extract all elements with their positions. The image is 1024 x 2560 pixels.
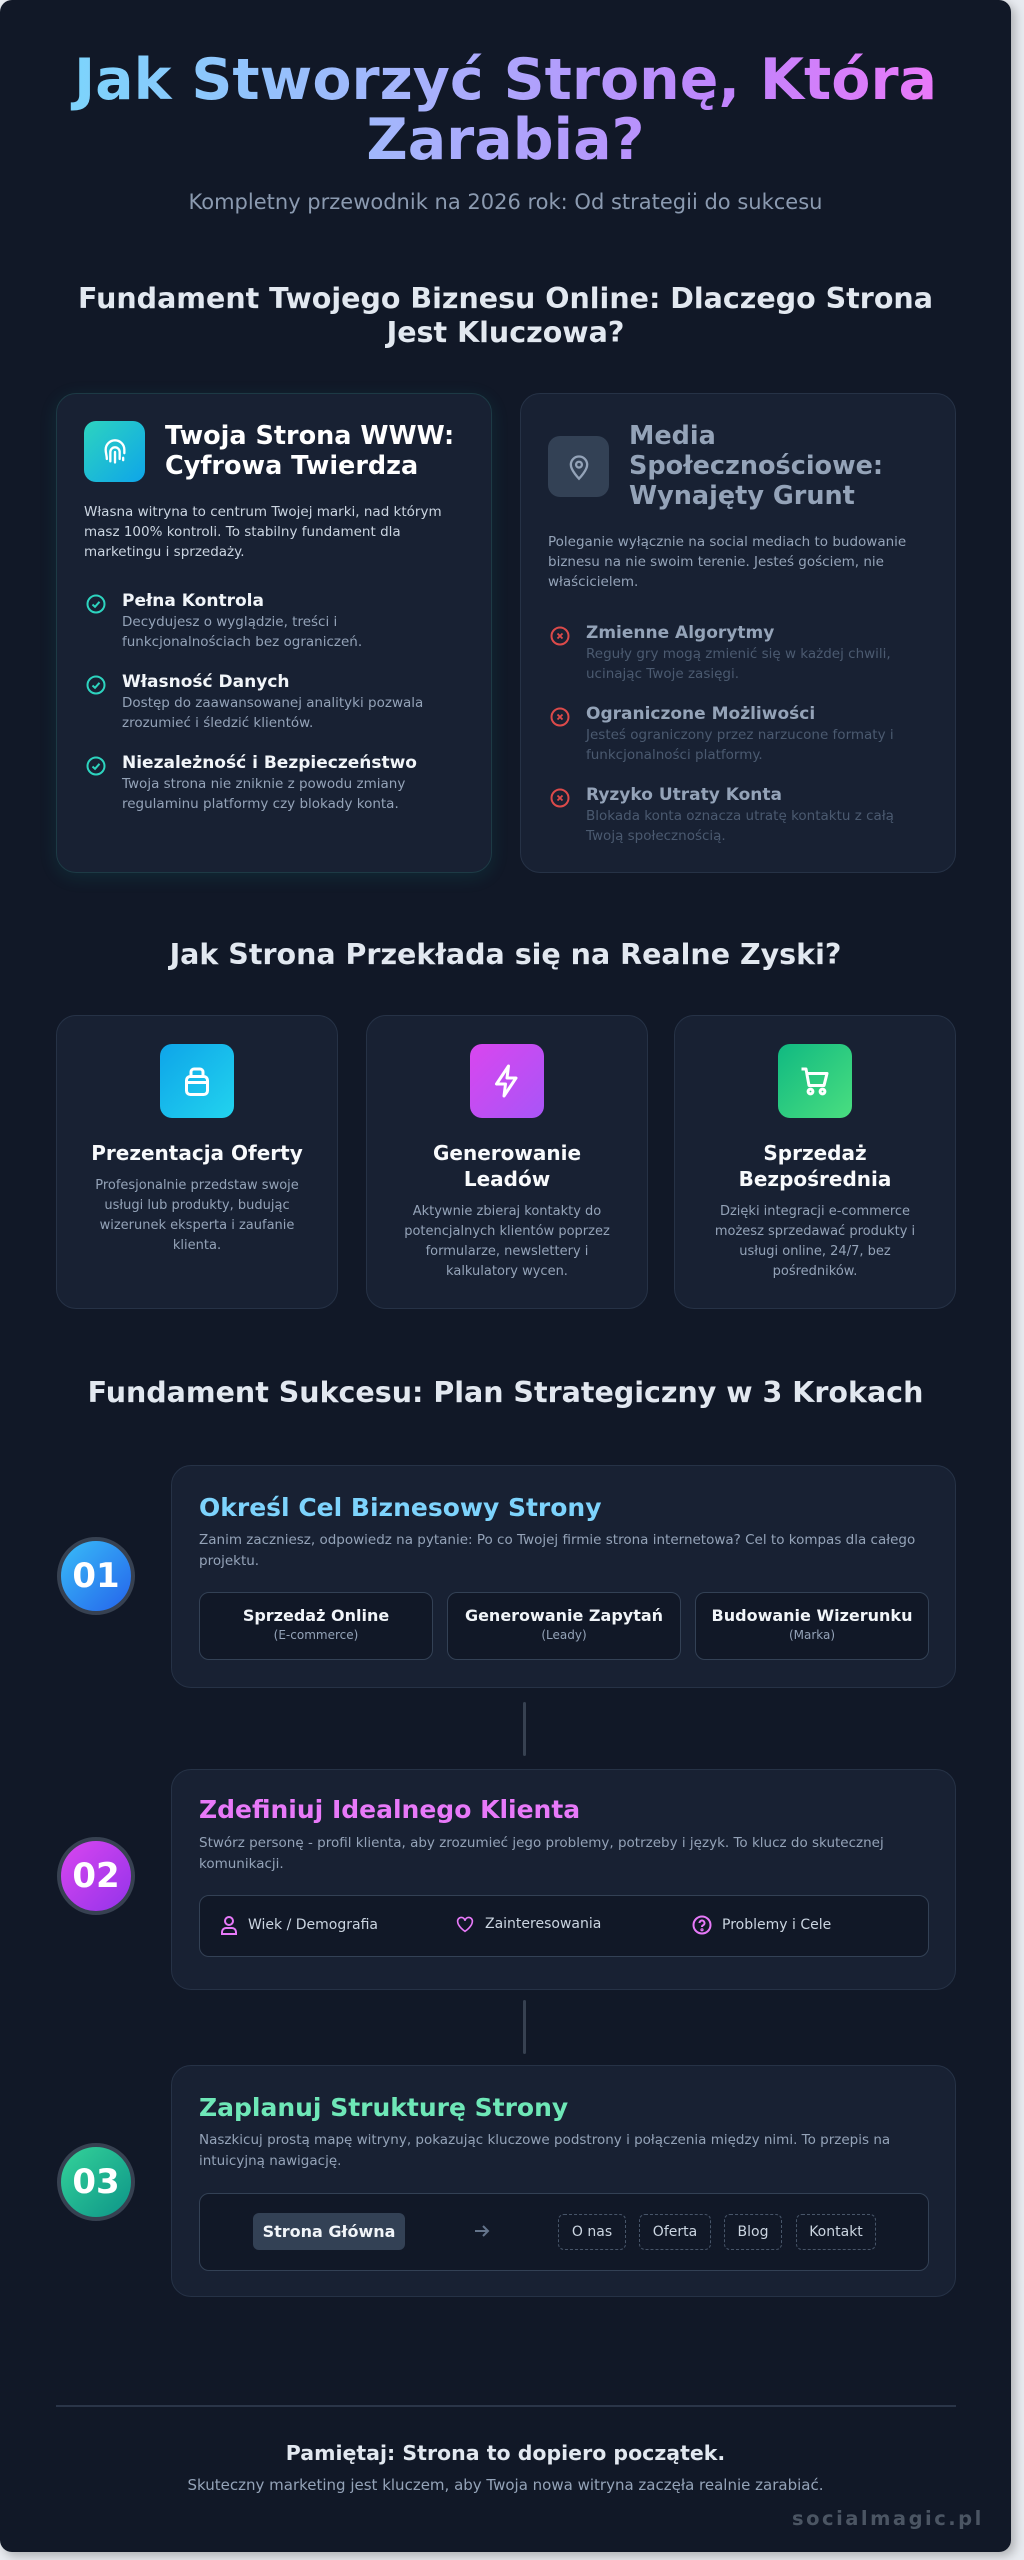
item: independence: Twoja strona nie zniknie z powodu zmiany regulaminu platformy czy blokady konta. xyxy=(122,776,405,812)
option: online sales: (E-commerce) xyxy=(274,1628,358,1642)
icon: cart xyxy=(778,1044,852,1118)
title: Zarabia? xyxy=(366,107,645,173)
icon: location pin xyxy=(548,436,609,497)
sitemap box xyxy=(199,2193,929,2271)
option: brand xyxy=(695,1592,929,1660)
heading: social xyxy=(629,421,883,511)
item: control xyxy=(86,591,362,650)
step 3 number xyxy=(57,2143,135,2221)
heading: website: Cyfrowa Twierdza xyxy=(165,451,418,481)
heading: website: Twoja Strona WWW: xyxy=(165,421,454,451)
title xyxy=(0,50,1011,170)
heading: section 3: Fundament Sukcesu: Plan Strategiczny w 3 Krokach xyxy=(88,1376,923,1409)
heading: social: Media xyxy=(629,421,716,451)
arrow xyxy=(475,2225,490,2237)
step 2 number: 02 xyxy=(72,1856,120,1896)
sitemap: subpages: O nas xyxy=(572,2224,612,2240)
panel: social media xyxy=(520,393,956,873)
panel: leads xyxy=(366,1015,648,1309)
panel: sales: Bezpośrednia xyxy=(739,1167,891,1191)
step 3 title: Zaplanuj Strukturę Strony xyxy=(199,2093,568,2122)
item: limits: Jesteś ograniczony przez narzucone formaty i funkcjonalności platformy. xyxy=(586,727,894,763)
sitemap: subpages xyxy=(558,2214,876,2250)
item: account loss: Blokada konta oznacza utratę kontaktu z całą Twoją społecznością. xyxy=(586,808,894,844)
item: data xyxy=(86,672,423,731)
heading: section 2: Jak Strona Przekłada się na Realne Zyski? xyxy=(170,938,841,971)
footer: reminder: Pamiętaj: Strona to dopiero początek. xyxy=(286,2441,725,2465)
panel: leads: Generowanie xyxy=(433,1141,581,1165)
heading: section 1: Fundament Twojego Biznesu Online: Dlaczego Strona xyxy=(78,282,933,315)
item: data: Własność Danych xyxy=(122,672,290,692)
item: limits: Ograniczone Możliwości xyxy=(586,704,815,724)
option: inquiries: Generowanie Zapytań xyxy=(465,1606,663,1625)
item: independence xyxy=(86,753,417,812)
step 2 text: Stwórz personę - profil klienta, aby zrozumieć jego problemy, potrzeby i język. To klucz do skutecznej komunikacji. xyxy=(199,1835,884,1872)
panel: website xyxy=(56,393,492,873)
option: online sales: Sprzedaż Online xyxy=(243,1606,389,1625)
panel: leads: Aktywnie zbieraj kontakty do potencjalnych klientów poprzez formularze, newslettery i kalkulatory wycen. xyxy=(404,1204,610,1279)
persona: problems: Problemy i Cele xyxy=(722,1917,831,1933)
step 1 number xyxy=(57,1537,135,1615)
heading: section 1 xyxy=(78,282,933,349)
item: control: Pełna Kontrola xyxy=(122,591,264,611)
panel: step 3 xyxy=(171,2065,956,2297)
option: inquiries xyxy=(447,1592,681,1660)
option: online sales xyxy=(199,1592,433,1660)
list: risks xyxy=(550,623,894,844)
text: website intro: Własna witryna to centrum Twojej marki, nad którym masz 100% kontroli. To stabilny fundament dla marketingu i sprzedaży. xyxy=(84,504,442,560)
step 1 text: Zanim zaczniesz, odpowiedz na pytanie: Po co Twojej firmie strona internetowa? Cel to kompas dla całego projektu. xyxy=(199,1532,915,1569)
step 3 text: Naszkicuj prostą mapę witryny, pokazując kluczowe podstrony i połączenia między nimi. To przepis na intuicyjną nawigację. xyxy=(199,2132,890,2169)
persona: interests: Zainteresowania xyxy=(485,1916,601,1932)
footer: subtext: Skuteczny marketing jest kluczem, aby Twoja nowa witryna zaczęła realnie zarabiać. xyxy=(188,2476,823,2494)
persona: problems xyxy=(692,1916,831,1934)
item: limits xyxy=(550,704,894,763)
option: brand: Budowanie Wizerunku xyxy=(712,1606,912,1625)
persona: demography xyxy=(221,1916,378,1935)
sitemap: subpages: Blog xyxy=(738,2224,768,2240)
subtitle: Kompletny przewodnik na 2026 rok: Od strategii do sukcesu xyxy=(189,190,822,214)
panel: sales: Dzięki integracji e-commerce możesz sprzedawać produkty i usługi online, 24/7, bez pośredników. xyxy=(715,1204,915,1279)
heading: social: Wynajęty Grunt xyxy=(629,481,855,511)
icon: briefcase xyxy=(160,1044,234,1118)
panel: offer xyxy=(56,1015,338,1309)
heading: website xyxy=(165,421,454,481)
list: benefits xyxy=(86,591,423,812)
panel: offer: Profesjonalnie przedstaw swoje usługi lub produkty, budując wizerunek eksperta i zaufanie klienta. xyxy=(95,1178,299,1253)
step 3 number: 03 xyxy=(72,2162,120,2202)
text: social intro: Poleganie wyłącznie na social mediach to budowanie biznesu na nie swoim terenie. Jesteś gościem, nie właścicielem. xyxy=(548,534,906,590)
step 1 number: 01 xyxy=(72,1556,120,1596)
step 2 title: Zdefiniuj Idealnego Klienta xyxy=(199,1795,580,1824)
sitemap: home: Strona Główna xyxy=(263,2222,395,2241)
option: inquiries: (Leady) xyxy=(541,1628,587,1642)
step 1 title: Określ Cel Biznesowy Strony xyxy=(199,1493,602,1522)
option: brand: (Marka) xyxy=(789,1628,835,1642)
panel: leads: Leadów xyxy=(464,1167,550,1191)
item: algorithms xyxy=(550,623,891,682)
icon: fingerprint xyxy=(84,421,145,482)
heading: social: Społecznościowe: xyxy=(629,451,883,481)
item: algorithms: Zmienne Algorytmy xyxy=(586,623,774,643)
icon: lightning xyxy=(470,1044,544,1118)
title: Jak Stworzyć Stronę, Która xyxy=(74,47,937,113)
sitemap: subpages: Kontakt xyxy=(809,2224,863,2240)
sitemap: home xyxy=(253,2213,405,2250)
item: algorithms: Reguły gry mogą zmienić się w każdej chwili, ucinając Twoje zasięgi. xyxy=(586,646,891,682)
brand: socialmagic.pl xyxy=(792,2507,984,2530)
persona box xyxy=(199,1895,929,1957)
sitemap: subpages: Oferta xyxy=(653,2224,697,2240)
item: independence: Niezależność i Bezpieczeństwo xyxy=(122,753,417,773)
item: account loss: Ryzyko Utraty Konta xyxy=(586,785,782,805)
panel: step 2 xyxy=(171,1769,956,1990)
panel: step 1 xyxy=(171,1465,956,1688)
persona: demography: Wiek / Demografia xyxy=(248,1917,378,1933)
item: account loss xyxy=(550,785,894,844)
item: control: Decydujesz o wyglądzie, treści i funkcjonalnościach bez ograniczeń. xyxy=(122,614,362,650)
panel: offer: Prezentacja Oferty xyxy=(91,1141,303,1165)
step 2 number xyxy=(57,1837,135,1915)
panel: sales xyxy=(674,1015,956,1309)
panel: sales: Sprzedaż xyxy=(763,1141,867,1165)
item: data: Dostęp do zaawansowanej analityki pozwala zrozumieć i śledzić klientów. xyxy=(122,695,423,731)
heading: section 1: Jest Kluczowa? xyxy=(387,316,624,349)
